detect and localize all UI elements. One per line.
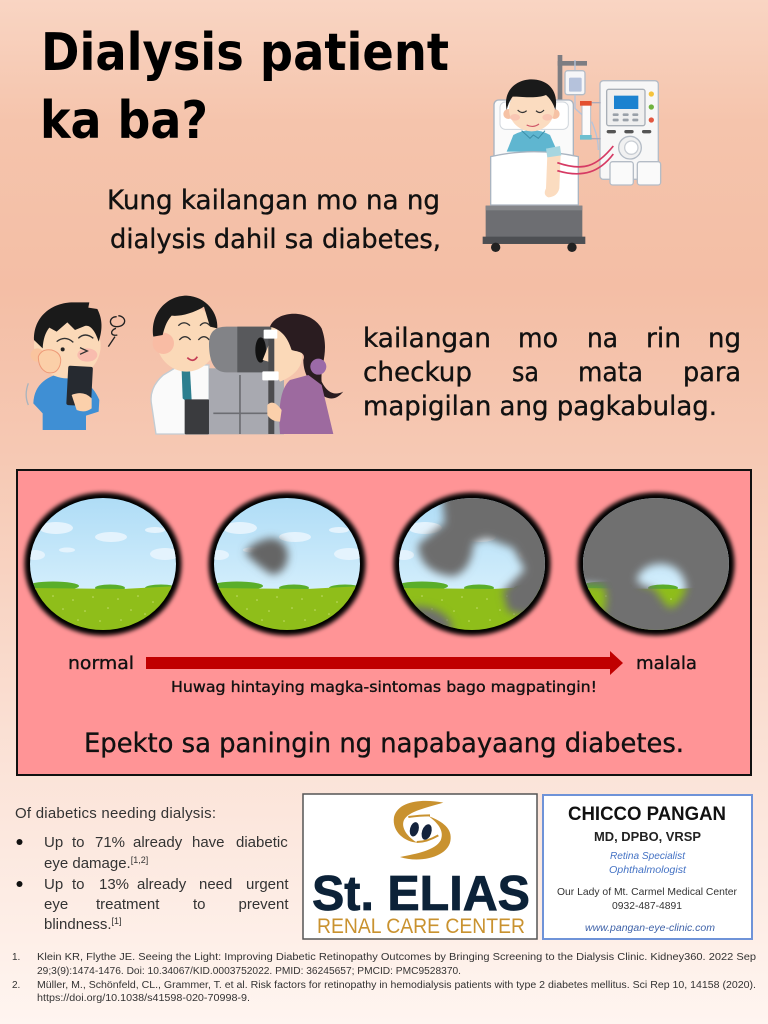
statistics text: urgent [246, 876, 289, 893]
intro text: Kung kailangan mo na ng [107, 185, 440, 216]
icon: man rubbing eye with phone [26, 302, 125, 430]
statistics text: Up [44, 876, 63, 893]
checkup text: checkup [363, 357, 472, 388]
statistics text: blindness. [44, 916, 112, 933]
doctor contact card [543, 795, 752, 939]
checkup text: mata [578, 357, 643, 388]
doctor contact card: 0932-487-4891 [612, 900, 682, 912]
checkup text: kailangan [363, 323, 491, 354]
vision circle: normal [24, 492, 182, 636]
checkup text: rin [646, 323, 681, 354]
label: normal: normal [68, 653, 134, 674]
statistics text: [1,2] [131, 855, 148, 865]
checkup text: sa [512, 357, 539, 388]
icon: doctor examining patient's eyes [151, 296, 343, 434]
checkup text: para [683, 357, 741, 388]
statistics text: 71% [95, 834, 125, 851]
checkup text [363, 323, 741, 422]
intro text [107, 185, 441, 255]
panel heading: Epekto sa paningin ng napabayaang diabetes. [84, 728, 684, 759]
references: 2. [12, 980, 20, 991]
vision circle: large dark patches [390, 489, 554, 639]
doctor contact card: CHICCO PANGAN [568, 804, 726, 825]
statistics text [15, 805, 289, 933]
vision circle: almost complete loss [574, 489, 738, 639]
checkup text: na [587, 323, 618, 354]
references: Müller, M., Schönfeld, CL., Grammer, T. et al. Risk factors for retinopathy in hemodialysis patients with type 2 diabetes mellitus. Sci Rep 10, 14158 (2020). [37, 980, 756, 991]
statistics text: to [72, 876, 85, 893]
checkup text: ng [708, 323, 741, 354]
statistics text: eye [44, 896, 68, 913]
vision circle: small dark spot [208, 492, 366, 636]
doctor contact card: Retina Specialist [610, 850, 686, 862]
statistics text: already [137, 876, 187, 893]
statistics text: already [133, 834, 183, 851]
statistics text: Up [44, 834, 63, 851]
panel: vision progression [17, 466, 764, 775]
intro text: dialysis dahil sa diabetes, [110, 224, 441, 255]
references [12, 952, 756, 1004]
logo: St. Elias Renal Care Center: RENAL CARE CENTER [317, 915, 525, 938]
statistics text: diabetic [236, 834, 288, 851]
statistics text: need [199, 876, 232, 893]
title: Dialysis patient [41, 23, 449, 83]
logo: St. Elias Renal Care Center: St. ELIAS [312, 867, 530, 921]
statistics text: prevent [238, 896, 289, 913]
title [40, 23, 449, 151]
arrow: progression [146, 651, 623, 675]
caption: do not wait: Huwag hintaying magka-sintomas bago magpatingin! [171, 678, 597, 696]
doctor contact card: www.pangan-eye-clinic.com [585, 922, 715, 934]
references: Klein KR, Flythe JE. Seeing the Light: Improving Diabetic Retinopathy Outcomes by Bringing Screening to the Dialysis Clinic. Kidney360. 2022 Sep [37, 952, 756, 963]
statistics text: 13% [99, 876, 129, 893]
statistics text: to [193, 896, 206, 913]
doctor contact card: MD, DPBO, VRSP [594, 829, 701, 844]
statistics text: eye damage. [44, 855, 131, 872]
statistics text: to [72, 834, 85, 851]
references: https://doi.org/10.1038/s41598-020-70998-9. [37, 993, 250, 1004]
label: malala: malala [636, 653, 697, 674]
doctor contact card: Ophthalmologist [609, 864, 687, 876]
references: 1. [12, 952, 20, 963]
icon: patient on dialysis machine [483, 55, 661, 252]
statistics text: Of diabetics needing dialysis: [15, 805, 216, 822]
statistics text: treatment [96, 896, 160, 913]
references: 29;3(9):1474-1476. Doi: 10.34067/KID.0003752022. PMID: 36245657; PMCID: PMC9528370. [37, 966, 461, 977]
icon: gold swirl logo mark [394, 801, 451, 860]
checkup text: mo [518, 323, 558, 354]
doctor contact card: Our Lady of Mt. Carmel Medical Center [557, 886, 737, 898]
statistics text: [1] [112, 916, 122, 926]
logo: St. Elias Renal Care Center [303, 794, 537, 939]
statistics text: have [192, 834, 225, 851]
title: ka ba? [40, 91, 208, 151]
checkup text: mapigilan ang pagkabulag. [363, 391, 717, 422]
